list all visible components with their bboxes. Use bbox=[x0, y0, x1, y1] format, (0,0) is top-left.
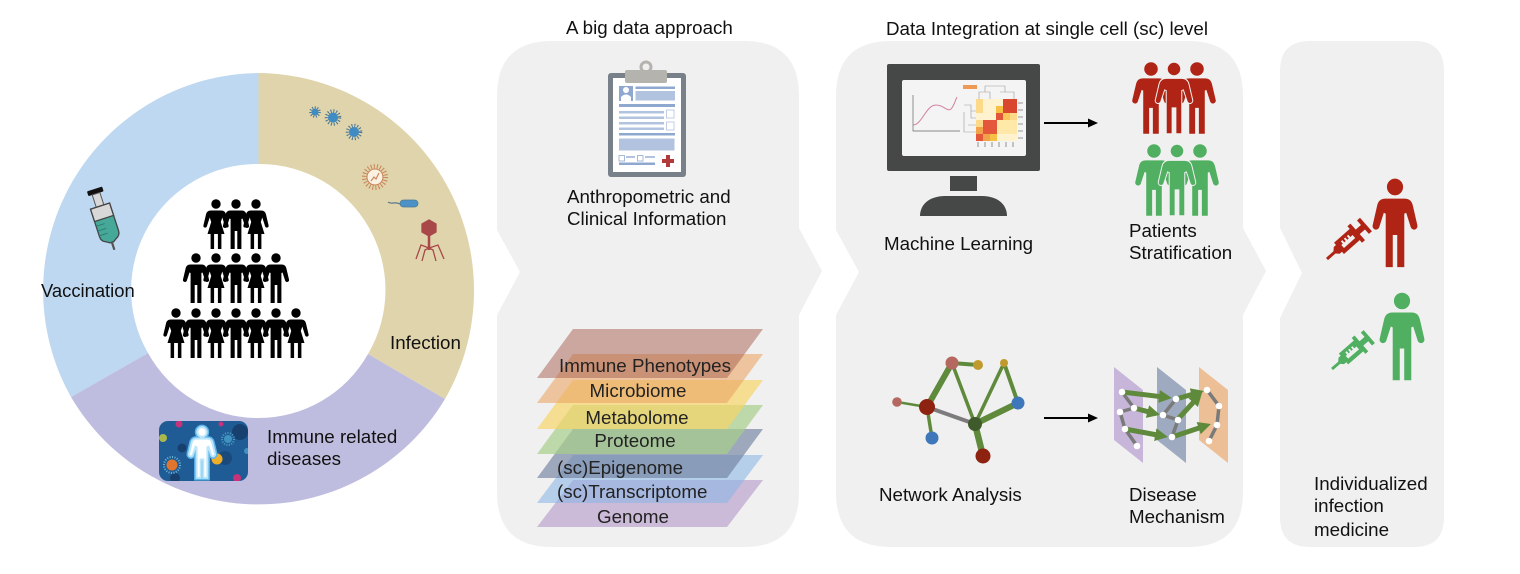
icon: red syringe bbox=[1320, 216, 1373, 267]
icon: population pyramid bbox=[163, 199, 309, 358]
icon: immune diseases image bbox=[159, 420, 250, 483]
label: disease mechanism: Mechanism bbox=[1129, 506, 1225, 527]
label: machine learning: Machine Learning bbox=[884, 233, 1033, 254]
label: individualized infection medicine: Individualized bbox=[1314, 473, 1428, 494]
label: immune related diseases: Immune related bbox=[267, 426, 397, 447]
label: patients stratification: Stratification bbox=[1129, 242, 1232, 263]
arrow: to patients stratification bbox=[1044, 118, 1098, 128]
icon: red patient bbox=[1373, 179, 1417, 267]
omics layer labels: Metabolome bbox=[585, 407, 689, 428]
panel background bbox=[1280, 41, 1444, 547]
arrow: to disease mechanism bbox=[1044, 414, 1098, 422]
icon: clinical clipboard bbox=[608, 62, 686, 177]
icon: red patient group bbox=[1132, 62, 1216, 134]
label: network analysis: Network Analysis bbox=[879, 484, 1022, 505]
label: anthropometric: Anthropometric and bbox=[567, 186, 731, 207]
omics layer labels: (sc)Epigenome bbox=[557, 457, 683, 478]
panel: big data approach bbox=[497, 41, 822, 547]
icon: bacterium bbox=[388, 200, 418, 207]
omics layer labels bbox=[557, 355, 731, 527]
label: disease mechanism: Disease bbox=[1129, 484, 1197, 505]
omics layer labels: Immune Phenotypes bbox=[559, 355, 731, 376]
omics layer labels: Microbiome bbox=[590, 380, 686, 401]
omics layer labels: Genome bbox=[597, 506, 669, 527]
panel background bbox=[836, 41, 1266, 547]
segment: infection bbox=[258, 73, 474, 399]
icon: monitor with charts bbox=[887, 64, 1040, 216]
icon: green syringe bbox=[1325, 329, 1376, 377]
heading: big data approach: A big data approach bbox=[566, 17, 733, 38]
segment: immune related diseases bbox=[71, 353, 445, 504]
label: anthropometric: Clinical Information bbox=[567, 208, 726, 229]
label: immune related diseases: diseases bbox=[267, 448, 341, 469]
heading: data integration: Data Integration at single cell (sc) level bbox=[886, 18, 1208, 39]
network graph bbox=[892, 356, 1024, 464]
panel: individualized infection medicine bbox=[1280, 41, 1444, 547]
panel background bbox=[497, 41, 822, 547]
icon: small viruses bbox=[310, 108, 360, 138]
segment: vaccination bbox=[43, 73, 258, 397]
panel: data integration bbox=[836, 41, 1266, 547]
label: infection: Infection bbox=[390, 332, 461, 353]
label: individualized infection medicine: medicine bbox=[1314, 519, 1389, 540]
icon: vaccine syringe bbox=[85, 186, 124, 253]
omics layer labels: (sc)Transcriptome bbox=[557, 481, 707, 502]
icon: green patient group bbox=[1135, 144, 1219, 216]
multilayer disease mechanism diagram bbox=[1114, 367, 1228, 463]
icon: bacteriophage bbox=[416, 220, 444, 261]
label: vaccination: Vaccination bbox=[41, 280, 135, 301]
icon: orange virus bbox=[364, 166, 386, 188]
label: patients stratification: Patients bbox=[1129, 220, 1197, 241]
label: individualized infection medicine: infection bbox=[1314, 495, 1384, 516]
omics layer stack bbox=[537, 329, 763, 527]
icon: green patient bbox=[1380, 293, 1424, 380]
omics layer labels: Proteome bbox=[594, 430, 676, 451]
donut chart bbox=[41, 73, 474, 504]
